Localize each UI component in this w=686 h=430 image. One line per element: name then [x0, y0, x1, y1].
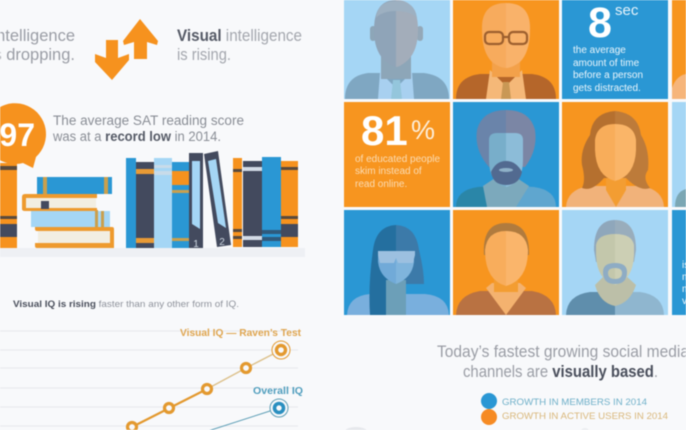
panel: 8 sec stat: the average	[573, 45, 626, 56]
callout: 97 SAT score bubble	[0, 103, 46, 168]
panel: portrait bearded man blue	[453, 102, 559, 207]
panel: 8 sec stat	[562, 0, 668, 99]
panel: 81% stat: %	[411, 115, 435, 145]
icon: up and down arrows	[95, 19, 158, 80]
books: numbered binders	[189, 151, 231, 250]
panel: 81% stat: read online.	[355, 179, 407, 190]
books: upright middle group	[126, 158, 189, 248]
panel: cut-off light blue portrait	[672, 102, 686, 207]
text: verbal intelligence is dropping	[0, 27, 75, 64]
books: numbered binders: 1	[193, 239, 199, 250]
panel: portrait woman orange	[562, 102, 668, 207]
panel: portrait man orange	[453, 210, 559, 315]
heading: visual IQ is rising: Visual IQ is rising faster than any other form of IQ.	[13, 299, 239, 310]
books: numbered binders: 2	[219, 237, 225, 248]
panel: 81% stat	[344, 102, 450, 207]
heading: social media channels: channels are visually based.	[463, 363, 658, 381]
panel: 81% stat: 81	[361, 107, 408, 154]
panel: portrait goatee man light blue	[562, 210, 668, 315]
label: overall IQ: Overall IQ	[253, 385, 303, 397]
panel: portrait woman with glasses blue	[344, 210, 450, 315]
panel: portrait man with glasses orange	[453, 0, 559, 99]
panel: 8 sec stat: before a person	[573, 70, 643, 81]
legend	[481, 393, 668, 425]
line: visual IQ	[128, 341, 290, 430]
text: SAT reading score	[52, 113, 244, 144]
icons: cut-off social media circles	[343, 427, 589, 430]
legend item: active users: GROWTH IN ACTIVE USERS IN 2014	[502, 411, 668, 422]
panel: 8 sec stat: sec	[615, 2, 639, 19]
text: visual intelligence is rising: is rising.	[177, 46, 231, 64]
shelf	[0, 248, 305, 257]
icon: books on shelf	[0, 151, 298, 250]
text: visual intelligence is rising: Visual intelligence	[177, 27, 302, 45]
legend item: active users	[481, 409, 668, 425]
panel: cut-off blue stat	[672, 210, 686, 315]
callout: 97 SAT score bubble: 97	[0, 117, 35, 153]
panel: 8 sec stat: amount of time	[573, 58, 640, 69]
line chart: visual IQ and overall IQ	[0, 327, 303, 430]
panel: 8 sec stat: gets distracted.	[573, 83, 641, 94]
legend item: members	[481, 393, 647, 409]
books: horizontal stack	[22, 177, 114, 248]
line: overall IQ	[208, 399, 288, 430]
panel: 81% stat: of educated people	[355, 154, 441, 165]
text: SAT reading score: was at a record low in 2014.	[52, 129, 221, 144]
text: SAT reading score: The average SAT reading score	[53, 113, 244, 128]
text: visual intelligence is rising	[177, 27, 302, 64]
books: upright right group	[233, 157, 298, 247]
legend item: members: GROWTH IN MEMBERS IN 2014	[502, 397, 647, 408]
panel: 81% stat: skim instead of	[355, 166, 422, 177]
panel: 8 sec stat: 8	[588, 0, 612, 47]
label: visual IQ Raven's test: Visual IQ — Raven’s Test	[180, 327, 301, 339]
heading: social media channels	[437, 343, 686, 381]
book: cut-off orange spine	[0, 163, 17, 248]
panel: portrait man light blue	[344, 0, 450, 99]
panel: cut-off orange portrait	[672, 0, 686, 99]
